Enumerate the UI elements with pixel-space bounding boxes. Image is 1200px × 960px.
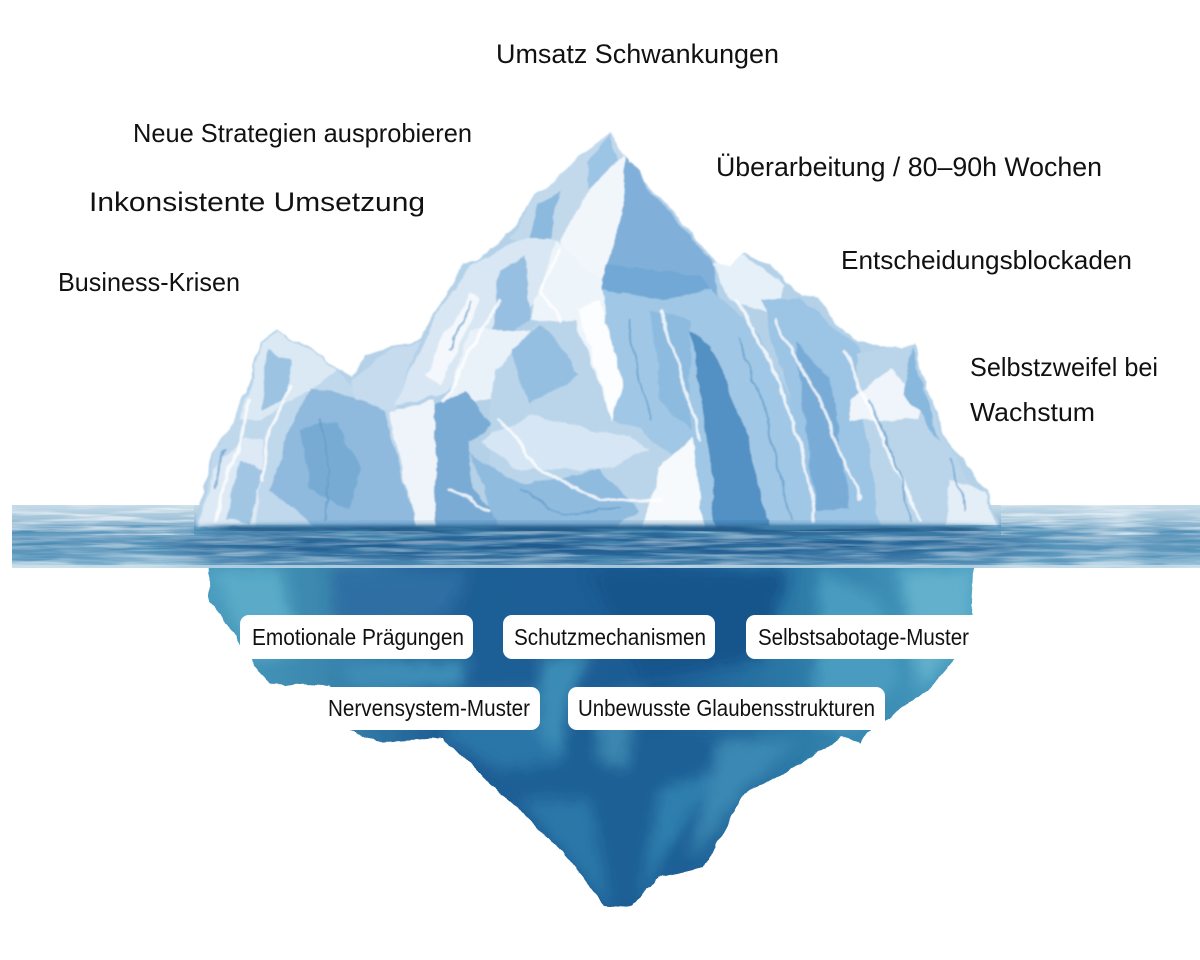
left small peak [197, 333, 436, 530]
water surface, front [12, 525, 1200, 568]
tag: Emotionale Prägungen [240, 615, 473, 659]
right shoulder [712, 255, 998, 530]
label: Selbstzweifel bei Wachstum [970, 352, 1158, 427]
label: Überarbeitung / 80-90h Wochen: Überarbeitung / 80–90h Wochen [716, 152, 1102, 182]
tag: Nervensystem-Muster [318, 687, 540, 730]
summit [510, 131, 720, 300]
label: Business-Krisen: Business-Krisen [58, 267, 240, 297]
water edge [12, 565, 1200, 568]
tag: Emotionale Prägungen: Emotionale Prägungen [252, 624, 464, 650]
ridges and creases [215, 250, 965, 520]
water highlights, left side [12, 505, 194, 535]
tag: Selbstsabotage-Muster: Selbstsabotage-Muster [758, 624, 969, 650]
tag: Nervensystem-Muster: Nervensystem-Muster [328, 695, 530, 721]
label: Umsatz Schwankungen: Umsatz Schwankungen [496, 39, 779, 69]
tag: Schutzmechanismen: Schutzmechanismen [514, 624, 706, 650]
iceberg above water [190, 120, 1005, 530]
label: Entscheidungsblockaden: Entscheidungsblockaden [841, 245, 1132, 275]
centre front [436, 300, 705, 530]
label: Neue Strategien ausprobieren: Neue Strategien ausprobieren [133, 118, 472, 148]
label: Inkonsistente Umsetzung: Inkonsistente Umsetzung [89, 187, 425, 217]
water surface, back [12, 505, 1200, 568]
right body [603, 265, 825, 530]
tag: Schutzmechanismen [503, 615, 715, 659]
tag: Unbewusste Glaubensstrukturen: Unbewusste Glaubensstrukturen [578, 695, 875, 721]
central massif left slope [395, 238, 556, 406]
iceberg below water [200, 555, 990, 915]
tag: Selbstsabotage-Muster [746, 615, 984, 659]
tag: Unbewusste Glaubensstrukturen [568, 687, 885, 730]
label: Selbstzweifel bei Wachstum: Selbstzweifel bei [970, 352, 1158, 382]
label: Selbstzweifel bei Wachstum: Wachstum [970, 397, 1095, 427]
water highlights, right side [1001, 505, 1200, 535]
